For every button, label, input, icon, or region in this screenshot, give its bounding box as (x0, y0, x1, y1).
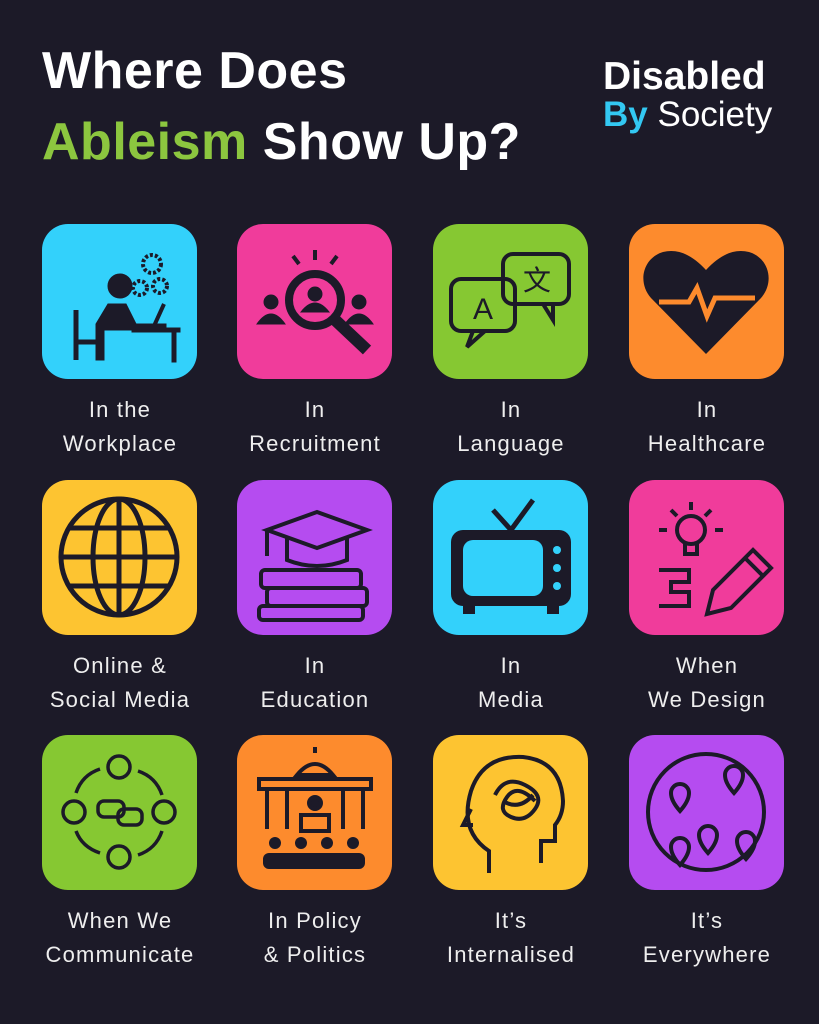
label: Language (457, 431, 565, 456)
title (42, 42, 521, 171)
tile: communicate (42, 735, 197, 890)
logo: Disabled (603, 55, 766, 98)
label (457, 397, 565, 456)
label (447, 908, 575, 967)
label: We Design (648, 687, 766, 712)
tile: language: 文 (523, 259, 551, 299)
label: When We (68, 908, 172, 933)
tile: healthcare (629, 224, 784, 379)
label: It’s (495, 908, 527, 933)
label: In the (89, 397, 151, 422)
label: In (305, 397, 325, 422)
label: In Policy (268, 908, 362, 933)
tile: media (433, 480, 588, 635)
label: Workplace (63, 431, 177, 456)
label: Education (261, 687, 369, 712)
label (643, 908, 771, 967)
label: Healthcare (648, 431, 766, 456)
label: In (697, 397, 717, 422)
label: It’s (691, 908, 723, 933)
label (648, 397, 766, 456)
label: Communicate (46, 942, 194, 967)
tile: language (433, 224, 588, 379)
label: In (501, 653, 521, 678)
tile: language: A (473, 293, 493, 326)
label: When (676, 653, 738, 678)
logo (603, 55, 772, 134)
title: Ableism Show Up? (42, 113, 521, 171)
label (46, 908, 194, 967)
tile: online (42, 480, 197, 635)
label (261, 653, 369, 712)
label (264, 908, 366, 967)
tile: workplace (42, 224, 197, 379)
label: Everywhere (643, 942, 771, 967)
label: Online & (73, 653, 167, 678)
tile: everywhere (629, 735, 784, 890)
logo: By Society (603, 95, 772, 134)
tile: education (237, 480, 392, 635)
label: Social Media (50, 687, 190, 712)
label (50, 653, 190, 712)
label (648, 653, 766, 712)
label (63, 397, 177, 456)
label: In (305, 653, 325, 678)
tile: internalised (433, 735, 588, 890)
label: Recruitment (249, 431, 381, 456)
tile: policy (237, 735, 392, 890)
tile: recruitment (237, 224, 392, 379)
label (478, 653, 544, 712)
label: & Politics (264, 942, 366, 967)
label: Media (478, 687, 544, 712)
label: In (501, 397, 521, 422)
label (249, 397, 381, 456)
tile: design (629, 480, 784, 635)
title: Where Does (42, 42, 348, 100)
label: Internalised (447, 942, 575, 967)
